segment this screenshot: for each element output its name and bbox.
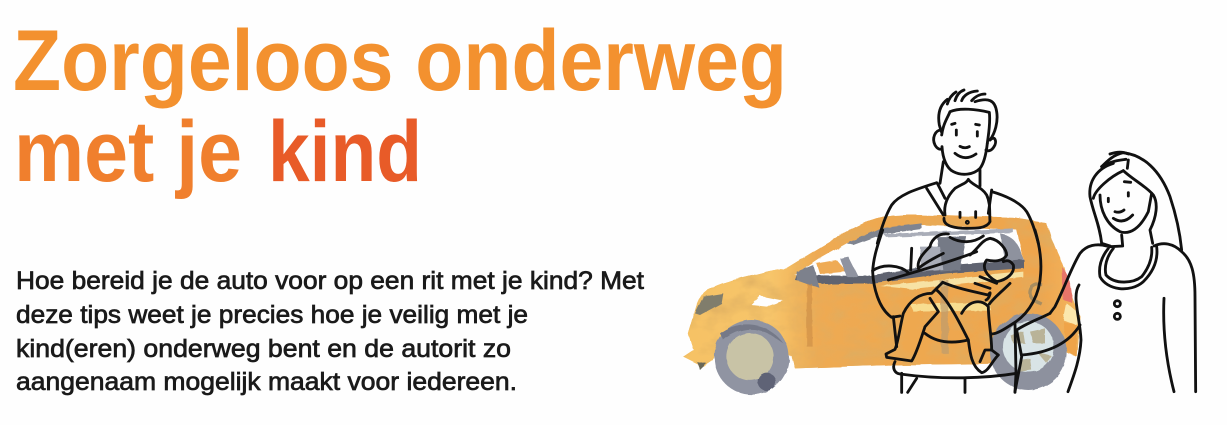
car body paint bbox=[683, 215, 1080, 368]
intro text bbox=[16, 267, 644, 396]
title: kind bbox=[268, 104, 422, 200]
illustration: mother bbox=[1015, 152, 1196, 392]
intro text: kind(eren) onderweg bent en de autorit zo bbox=[16, 335, 511, 363]
intro text: deze tips weet je precies hoe je veilig met je bbox=[16, 301, 528, 329]
illustration: father bbox=[873, 90, 1041, 392]
title bbox=[13, 13, 787, 200]
illustration: watercolour car bbox=[683, 215, 1080, 395]
intro text: aangenaam mogelijk maakt voor iedereen. bbox=[16, 368, 517, 396]
car windows and details bbox=[695, 223, 1079, 395]
title: met je bbox=[14, 104, 242, 200]
father body holding child bbox=[873, 230, 1041, 392]
title: Zorgeloos onderweg bbox=[13, 13, 787, 109]
intro text: Hoe bereid je de auto voor op een rit met je kind? Met bbox=[16, 267, 644, 295]
father head and shoulders bbox=[877, 90, 1038, 243]
